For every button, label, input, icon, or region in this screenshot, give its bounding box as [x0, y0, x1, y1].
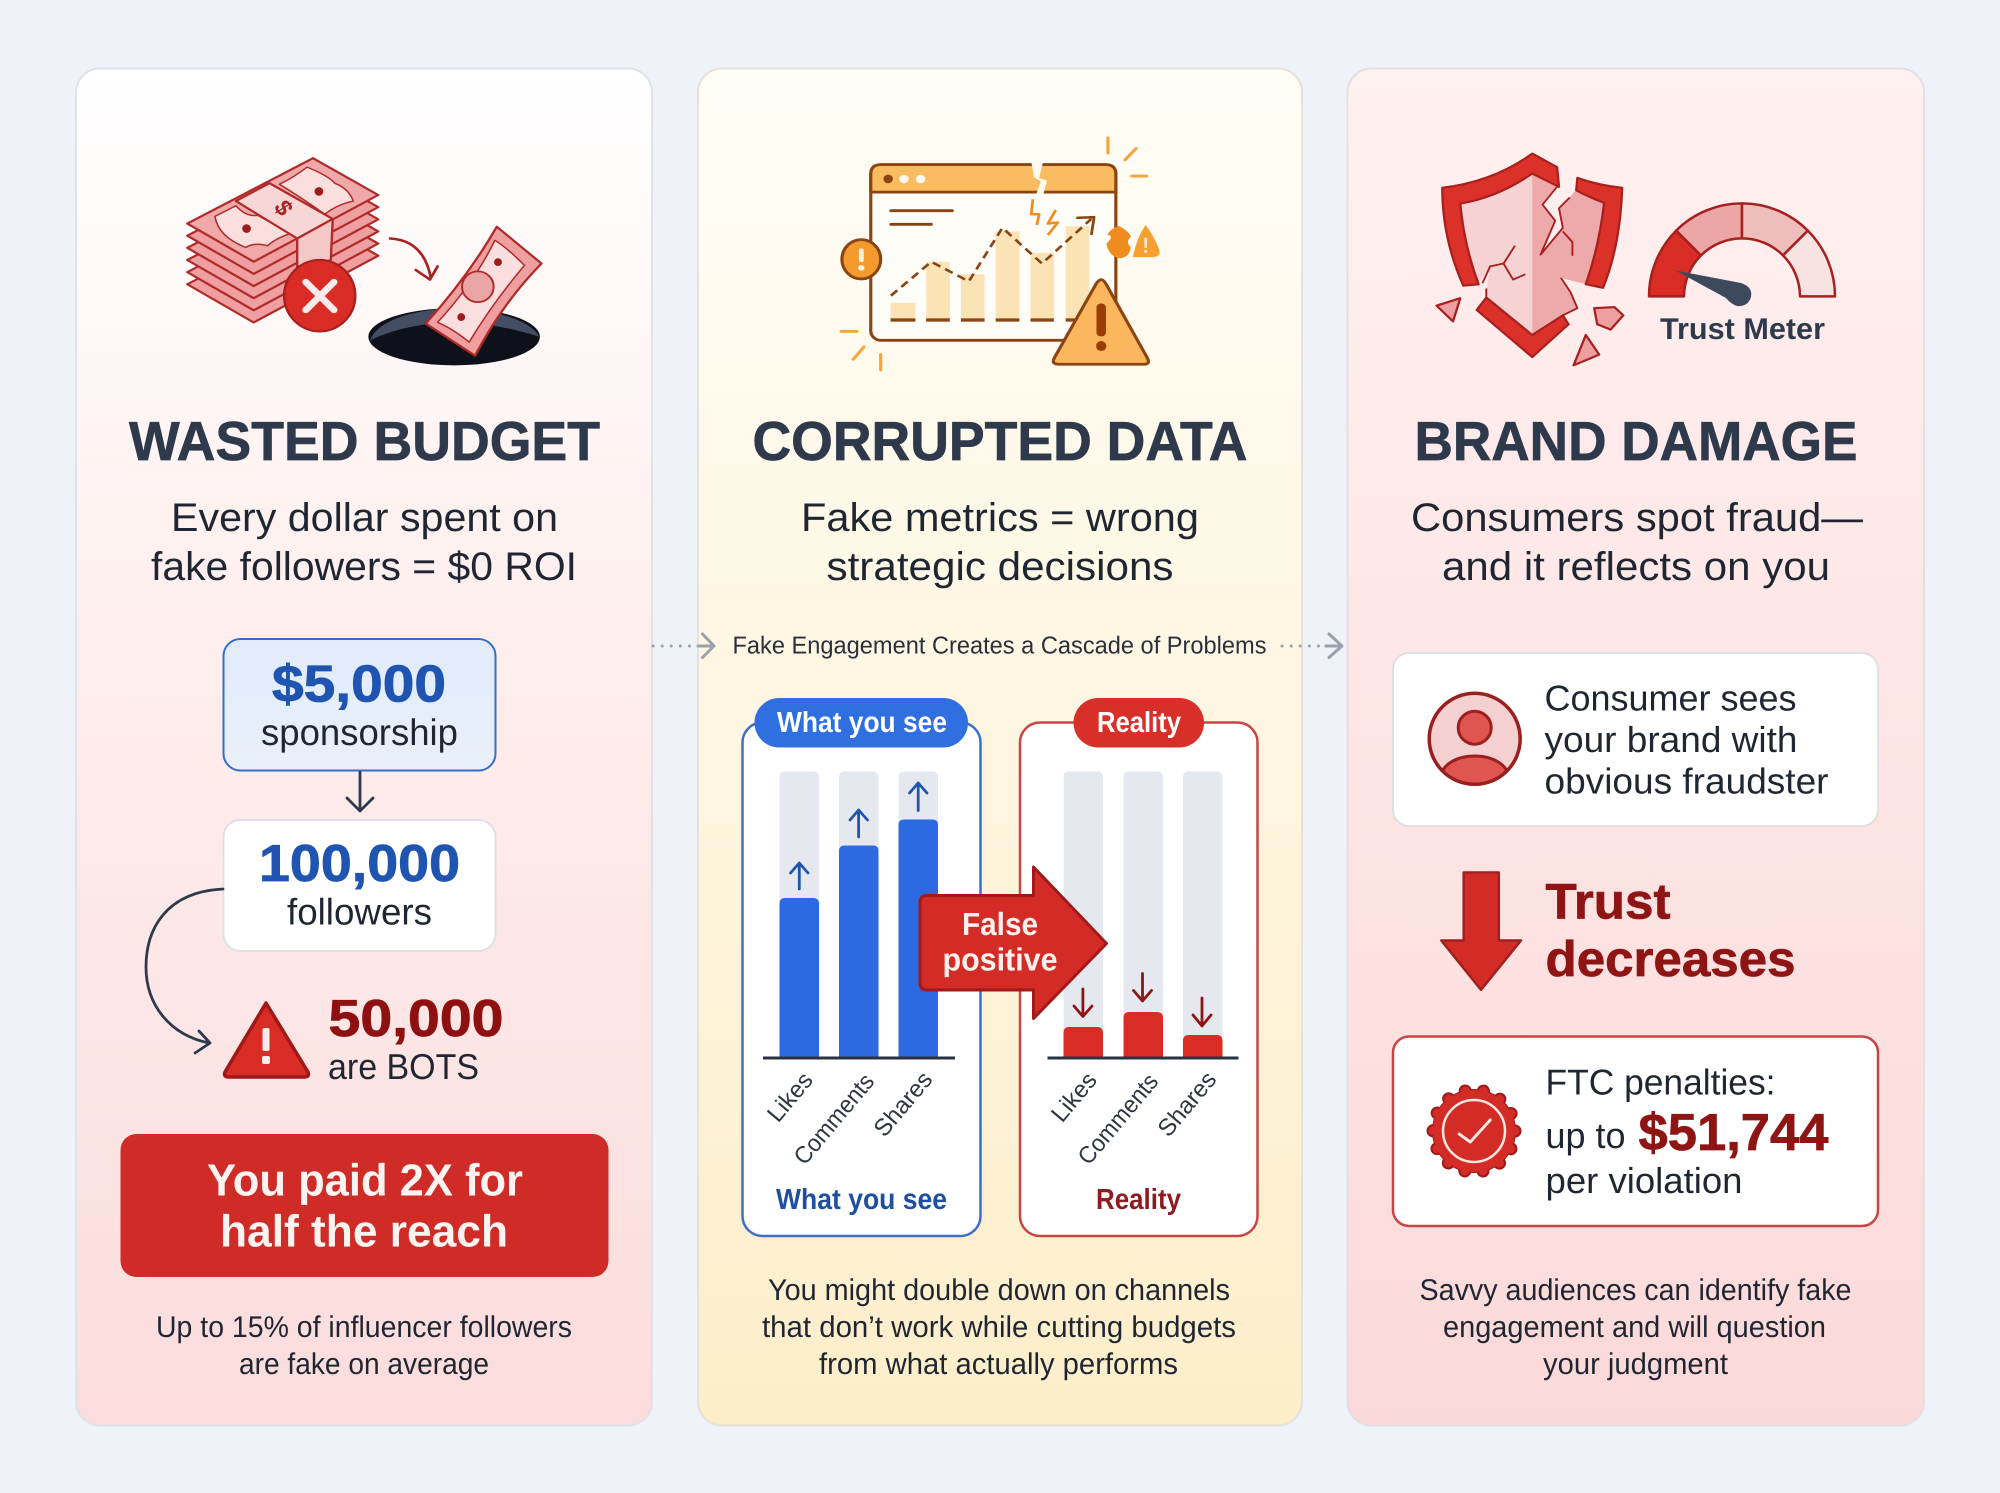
footnote: Up to 15% of influencer followers — [156, 1311, 572, 1344]
axis labels: Comments — [1073, 1069, 1164, 1170]
sponsorship box: $5,000 — [272, 656, 446, 714]
followers box: 100,000 — [259, 835, 460, 893]
footnote — [762, 1274, 1236, 1381]
arrow: false positive: False — [962, 906, 1038, 942]
consumer text: your brand with — [1544, 719, 1798, 760]
panel card — [1348, 68, 1924, 1426]
ftc text: $51,744 — [1638, 1104, 1829, 1162]
consumer text: obvious fraudster — [1544, 760, 1829, 802]
footnote: your judgment — [1543, 1348, 1729, 1381]
cascade caption: Fake Engagement Creates a Cascade of Problems — [732, 632, 1266, 660]
footnote: are fake on average — [239, 1348, 489, 1381]
panel: wasted budget — [76, 68, 652, 1426]
card caption: What you see — [776, 1184, 947, 1216]
gauge needle — [1676, 270, 1751, 306]
panel card — [76, 68, 652, 1426]
curved arrow to bots — [146, 889, 223, 1053]
axis labels — [762, 1067, 938, 1170]
followers box: followers — [287, 892, 432, 932]
bots stat: 50,000 — [328, 990, 504, 1048]
icon: down arrow — [1441, 872, 1521, 990]
arrow: false positive: positive — [942, 942, 1058, 978]
subheading: fake followers = $0 ROI — [151, 545, 577, 589]
inflated bars — [780, 820, 938, 1058]
axis labels: Likes — [762, 1067, 819, 1127]
callout banner: You paid 2X for — [207, 1154, 523, 1206]
panel card — [698, 68, 1302, 1426]
chart bars — [891, 226, 1089, 319]
down arrows — [1074, 974, 1211, 1026]
consumer text: Consumer sees — [1544, 678, 1796, 718]
icon: cracked shield — [1437, 154, 1623, 365]
axis — [1048, 1056, 1238, 1060]
up arrows — [790, 783, 927, 889]
ftc text: per violation — [1546, 1160, 1742, 1201]
pill label — [754, 698, 968, 748]
window crack — [1031, 162, 1047, 195]
spark rays — [841, 138, 1147, 370]
icon: warning triangle — [1053, 280, 1148, 364]
shield frame — [1442, 154, 1559, 286]
panel: corrupted data — [698, 68, 1302, 1426]
shards — [1437, 298, 1460, 321]
heading: BRAND DAMAGE — [1414, 410, 1858, 472]
callout banner: half the reach — [220, 1206, 508, 1256]
icon: falling bill — [426, 227, 541, 356]
pill label: What you see — [777, 707, 947, 739]
icon: red x badge — [284, 260, 355, 331]
icon: penalty badge — [1432, 1089, 1516, 1173]
ftc text: FTC penalties: — [1546, 1062, 1776, 1102]
subheading: and it reflects on you — [1442, 545, 1830, 589]
browser window — [871, 165, 1116, 340]
axis — [763, 1056, 955, 1060]
subheading: Consumers spot fraud— — [1411, 496, 1863, 540]
ftc text — [1546, 1062, 1829, 1201]
panel: brand damage — [1348, 68, 1924, 1426]
axis labels: Shares — [1153, 1067, 1222, 1142]
sponsorship box: sponsorship — [261, 712, 458, 753]
footnote: that don’t work while cutting budgets — [762, 1311, 1236, 1344]
pill label: Reality — [1097, 707, 1181, 739]
footnote: Savvy audiences can identify fake — [1420, 1274, 1852, 1307]
arrow: false positive — [920, 867, 1106, 1018]
icon: alert circle — [842, 240, 881, 279]
footnote — [1420, 1274, 1852, 1381]
consumer card — [1393, 653, 1878, 826]
cracks — [1482, 187, 1577, 315]
arrow: corrupted data to brand damage — [1282, 634, 1342, 658]
icon: warning triangle — [224, 1003, 308, 1077]
footnote — [156, 1311, 572, 1381]
icon: money stack falling into a hole — [187, 158, 541, 365]
bots stat: are BOTS — [328, 1046, 479, 1087]
lightning bolts — [1031, 199, 1058, 235]
subheading — [1411, 496, 1863, 589]
heading: CORRUPTED DATA — [752, 410, 1248, 472]
subheading: strategic decisions — [826, 545, 1174, 589]
broken fragments — [1106, 226, 1131, 258]
bar tracks — [1064, 772, 1222, 1058]
trust decreases: Trust — [1546, 874, 1671, 930]
axis labels — [1046, 1067, 1222, 1170]
arrow: wasted budget to corrupted data — [653, 634, 714, 658]
trust decreases: decreases — [1546, 931, 1796, 987]
subheading — [801, 496, 1199, 589]
icon: hole — [368, 308, 540, 365]
icon: trust meter gauge — [1649, 203, 1835, 306]
dashed trend line — [891, 219, 1091, 296]
bar tracks — [780, 772, 938, 1058]
arrow: sponsorship to followers — [347, 772, 373, 811]
card caption: Reality — [1096, 1184, 1181, 1216]
actual bars — [1064, 1012, 1222, 1058]
trust meter label: Trust Meter — [1660, 313, 1825, 346]
chart card: reality — [1020, 698, 1258, 1236]
pill label — [1074, 698, 1204, 748]
footnote: engagement and will question — [1443, 1311, 1826, 1344]
arrow to hole — [390, 239, 438, 280]
chart card: what you see — [742, 698, 980, 1236]
icon: consumer avatar — [1429, 693, 1520, 796]
subheading — [151, 496, 577, 589]
footnote: from what actually performs — [819, 1348, 1178, 1381]
icon: cash stack — [187, 158, 378, 322]
ftc text: up to — [1546, 1115, 1626, 1156]
axis labels: Shares — [869, 1067, 938, 1142]
followers box — [224, 820, 496, 951]
subheading: Fake metrics = wrong — [801, 496, 1199, 540]
callout banner — [120, 1134, 608, 1277]
axis labels: Comments — [789, 1069, 880, 1170]
heading: WASTED BUDGET — [129, 410, 600, 472]
ftc card — [1393, 1036, 1878, 1226]
bots stat — [328, 990, 504, 1087]
dollar sign: $ — [268, 196, 299, 220]
sponsorship box — [224, 639, 496, 770]
footnote: You might double down on channels — [768, 1274, 1230, 1307]
subheading: Every dollar spent on — [171, 496, 558, 540]
axis labels: Likes — [1046, 1067, 1103, 1127]
icon: corrupted chart window — [841, 138, 1160, 370]
consumer text — [1544, 678, 1829, 802]
trust decreases — [1546, 874, 1796, 987]
